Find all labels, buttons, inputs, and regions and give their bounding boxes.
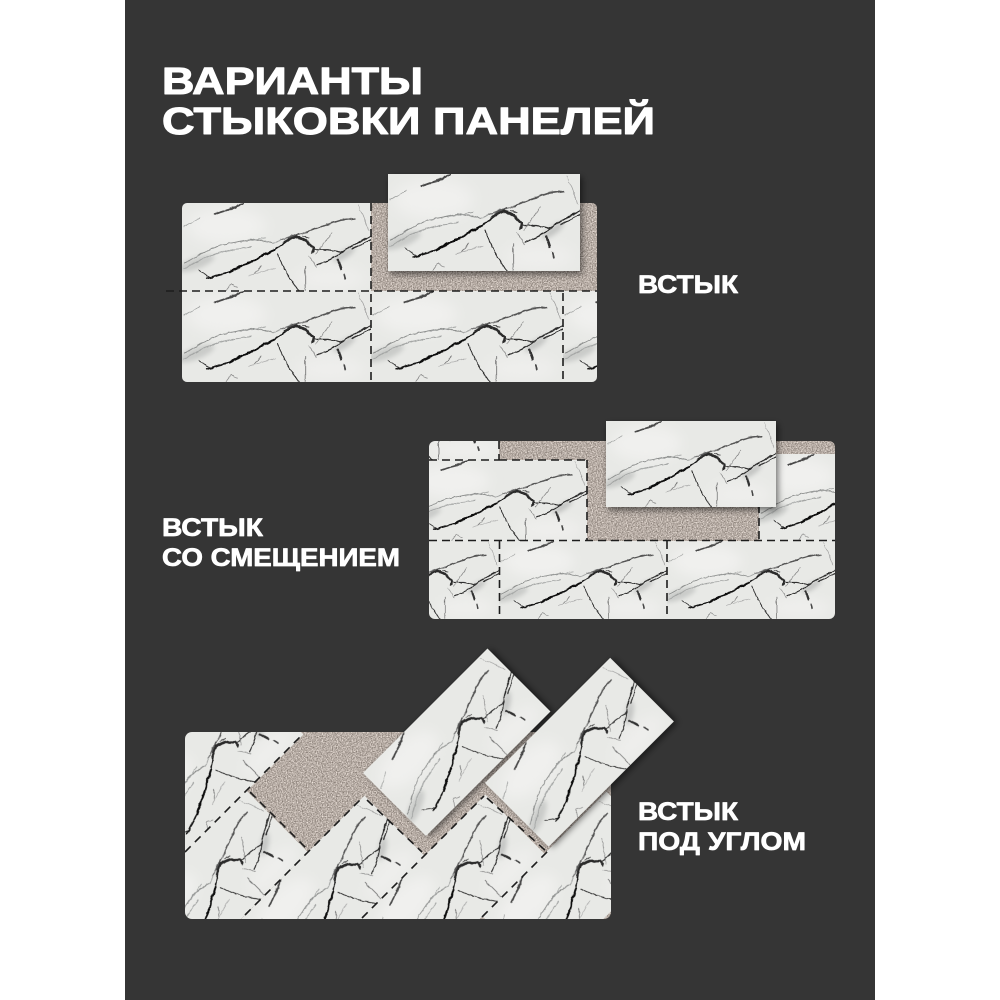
title: ВАРИАНТЫ: [162, 61, 423, 103]
label: butt joint: ВСТЫК: [638, 271, 739, 299]
floating tile: [600, 421, 776, 507]
background: dark panel: [125, 0, 875, 1000]
label: offset joint: [162, 514, 400, 572]
floating tile 1: [359, 649, 550, 840]
title: [162, 61, 655, 143]
floating tile 2: [481, 658, 674, 851]
panel: offset joint: [429, 421, 835, 619]
label: angled joint: ВСТЫК: [638, 798, 739, 826]
label: angled joint: ПОД УГЛОМ: [638, 828, 806, 856]
panel: angled joint: [185, 648, 677, 919]
title: СТЫКОВКИ ПАНЕЛЕЙ: [162, 98, 655, 143]
label: offset joint: ВСТЫК: [162, 514, 264, 542]
label: angled joint: [638, 798, 806, 856]
floating tile: [381, 174, 580, 271]
label: offset joint: СО СМЕЩЕНИЕМ: [162, 544, 400, 572]
panel: butt joint: [166, 174, 597, 382]
